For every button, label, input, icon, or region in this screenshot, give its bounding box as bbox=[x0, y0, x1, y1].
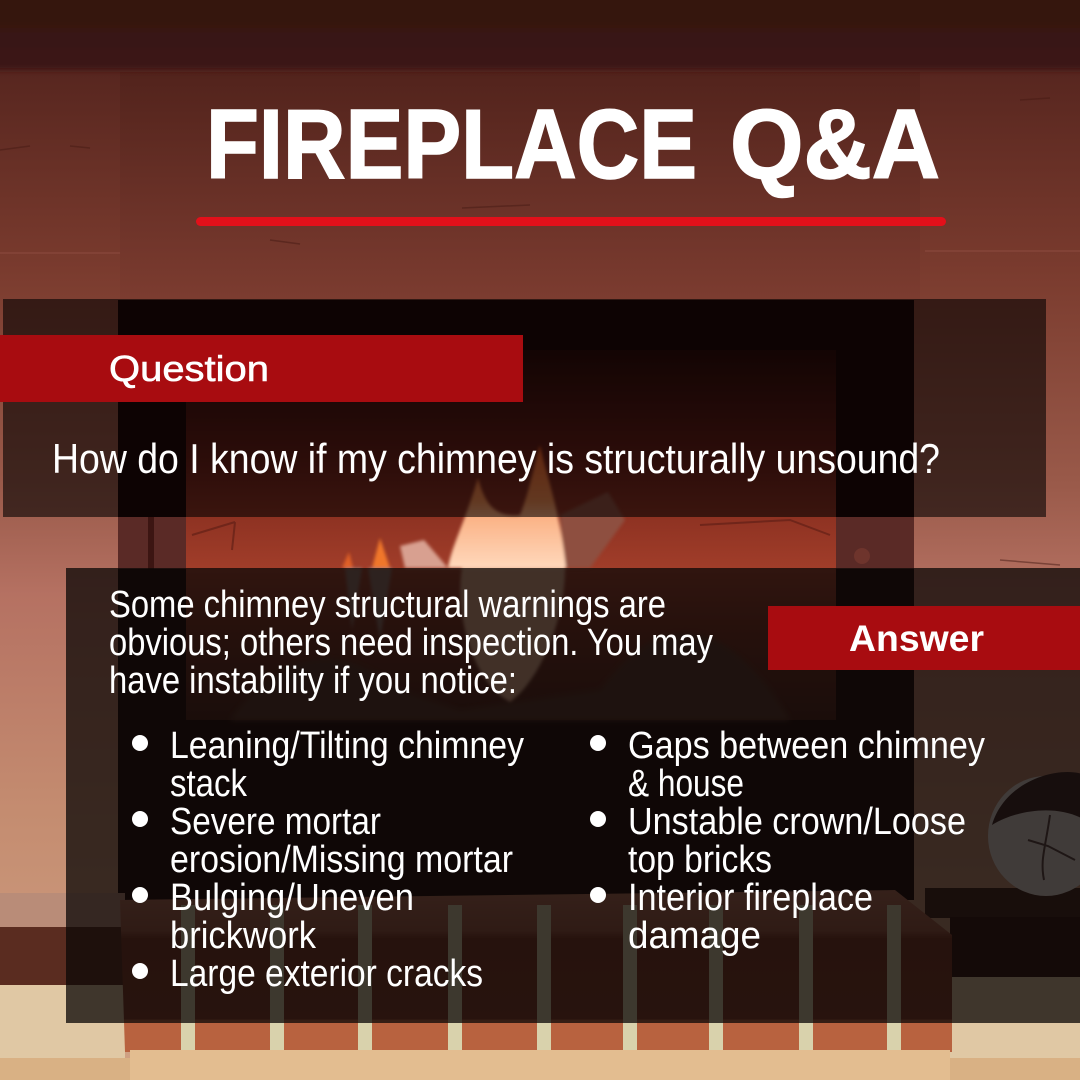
question label bar: Question bbox=[109, 348, 269, 389]
panel: answer bbox=[66, 568, 1080, 1023]
answer intro text: obvious; others need inspection. You may bbox=[109, 622, 713, 664]
right bullet list: Unstable crown/Loose bbox=[628, 801, 966, 843]
title underline bbox=[196, 217, 946, 226]
right bullet list bbox=[590, 725, 985, 957]
answer intro text bbox=[109, 584, 713, 702]
panel: question bbox=[0, 299, 1046, 517]
left bullet list: Leaning/Tilting chimney bbox=[170, 725, 524, 767]
answer label bar: Answer bbox=[849, 618, 984, 659]
question text: How do I know if my chimney is structurally unsound? bbox=[52, 435, 940, 482]
vase bbox=[988, 772, 1080, 896]
right bullet list: & house bbox=[628, 763, 744, 805]
right bullet list: Gaps between chimney bbox=[628, 725, 985, 767]
answer intro text: have instability if you notice: bbox=[109, 660, 517, 702]
left bullet list: brickwork bbox=[170, 915, 317, 957]
heading: FIREPLACE Q&A: FIREPLACE bbox=[206, 89, 697, 199]
heading: FIREPLACE Q&A: Q&A bbox=[730, 89, 940, 199]
right ledge bbox=[925, 888, 1080, 918]
left bullet list: erosion/Missing mortar bbox=[170, 839, 513, 881]
flames bbox=[342, 445, 625, 702]
firebox frame bbox=[118, 300, 914, 900]
right bullet list: damage bbox=[628, 915, 761, 957]
left ledge bbox=[0, 893, 125, 927]
left bullet list bbox=[132, 725, 524, 995]
answer label bar bbox=[768, 606, 1080, 670]
left bullet list: Severe mortar bbox=[170, 801, 381, 843]
right bullet list: top bricks bbox=[628, 839, 772, 881]
right bullet list: Interior fireplace bbox=[628, 877, 873, 919]
left bullet list: Bulging/Uneven bbox=[170, 877, 414, 919]
answer intro text: Some chimney structural warnings are bbox=[109, 584, 666, 626]
logs bbox=[230, 634, 790, 720]
hearth brick bbox=[120, 890, 952, 1052]
left bullet list: stack bbox=[170, 763, 248, 805]
left bullet list: Large exterior cracks bbox=[170, 953, 483, 995]
question label bar bbox=[0, 335, 523, 402]
